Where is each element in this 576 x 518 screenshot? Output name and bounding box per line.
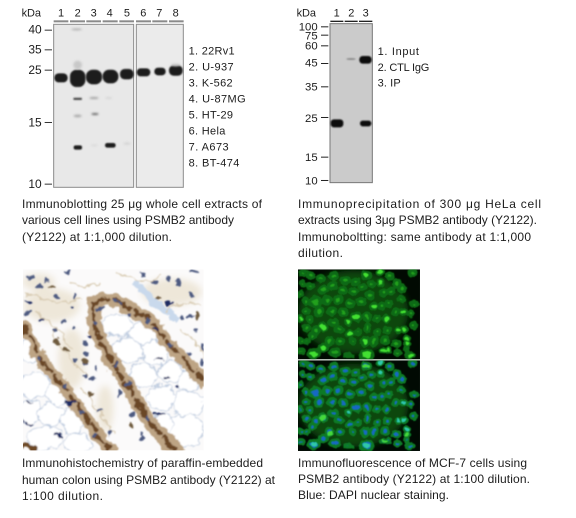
- stroma tint: [22, 274, 202, 432]
- crypt epithelium, lower left: [23, 327, 110, 450]
- dark nuclei: [24, 300, 180, 437]
- molecular weight markers: 15: [305, 152, 318, 164]
- caption: western blot: various cell lines using PSMB2 antibody: [22, 213, 234, 227]
- molecular weight markers: 25: [305, 113, 318, 125]
- molecular weight markers: 75: [305, 31, 318, 43]
- faint IgG band: [346, 58, 356, 60]
- crypt goblet cells: [19, 313, 205, 454]
- protein bands: [331, 56, 372, 127]
- molecular weight markers: 35: [305, 81, 318, 93]
- molecular weight markers: 35: [28, 42, 42, 56]
- protein bands: [54, 65, 183, 150]
- IP legend: 2. CTL IgG: [378, 62, 429, 74]
- stroma fibres: [25, 272, 204, 435]
- molecular weight markers: [299, 22, 318, 187]
- blot panel right: [136, 24, 183, 187]
- blue stroma streak: [135, 282, 178, 320]
- green channel panel: [298, 269, 420, 359]
- axis label kDa: kDa: [297, 8, 317, 20]
- caption: western blot: (Y2122) at 1:1,000 dilution.: [22, 230, 172, 244]
- molecular weight markers: [28, 23, 42, 191]
- blot axis label kDa: kDa: [22, 8, 42, 20]
- cell line legend: 4. U-87MG: [189, 94, 246, 106]
- molecular weight markers: 60: [305, 40, 318, 52]
- tissue texture group: [19, 270, 205, 454]
- lane numbers: 3: [363, 8, 369, 20]
- caption: western blot: [22, 197, 263, 244]
- marker ticks: [45, 30, 52, 185]
- caption: immunoprecipitation: [298, 197, 541, 260]
- immunohistochemistry image: [19, 269, 205, 454]
- bright green cells: [299, 270, 414, 358]
- caption: immunoprecipitation: Immunoboltting: same antibody at 1:1,000: [298, 230, 531, 244]
- IP legend: 3. IP: [378, 78, 401, 90]
- faint minor bands: [71, 28, 180, 146]
- blot panel: [330, 24, 372, 183]
- cell line legend: 7. A673: [189, 142, 229, 154]
- lane numbers: 8: [173, 8, 179, 20]
- caption: immunoprecipitation: Immunoprecipitation of 300 μg HeLa cell: [298, 197, 541, 211]
- molecular weight markers: 10: [28, 177, 42, 191]
- lane numbers: [58, 8, 179, 20]
- lane numbers: 6: [140, 8, 146, 20]
- cell line legend: 2. U-937: [189, 62, 234, 74]
- caption: immunohistochemistry: human colon using PSMB2 antibody (Y2122) at: [22, 473, 276, 487]
- IP legend: [378, 46, 429, 90]
- molecular weight markers: 25: [28, 63, 42, 77]
- brown stroma nuclei: [47, 285, 199, 431]
- cell line legend: 6. Hela: [189, 126, 226, 138]
- lane bars: [330, 21, 372, 22]
- caption: immunoprecipitation: extracts using 3μg PSMB2 antibody (Y2122).: [298, 213, 537, 227]
- caption: immunofluorescence: Immunofluorescence of MCF-7 cells using: [298, 456, 527, 470]
- cell line legend: [189, 46, 246, 170]
- caption: immunofluorescence: PSMB2 antibody (Y2122) at 1:100 dilution.: [298, 472, 530, 486]
- molecular weight markers: 100: [299, 22, 318, 34]
- cell line legend: 3. K-562: [189, 78, 233, 90]
- cell line legend: 5. HT-29: [189, 110, 233, 122]
- molecular weight markers: 10: [305, 175, 318, 187]
- caption: immunohistochemistry: Immunohistochemistry of paraffin-embedded: [22, 456, 263, 470]
- cell line legend: 8. BT-474: [189, 158, 239, 170]
- caption: immunohistochemistry: [22, 456, 276, 503]
- caption: western blot: Immunoblotting 25 μg whole cell extracts of: [22, 197, 263, 211]
- lane numbers: 1: [334, 8, 340, 20]
- cell line legend: 1. 22Rv1: [189, 46, 235, 58]
- lane numbers: 4: [107, 8, 113, 20]
- lane numbers: [334, 8, 369, 20]
- marker ticks: [321, 26, 328, 181]
- cell nuclei: [25, 270, 204, 439]
- molecular weight markers: 40: [28, 23, 42, 37]
- lane numbers: 5: [124, 8, 130, 20]
- crypt epithelium, upper right: [94, 299, 204, 450]
- IP legend: 1. Input: [378, 46, 419, 58]
- lane numbers: 1: [58, 8, 64, 20]
- caption: immunofluorescence: [298, 456, 530, 502]
- molecular weight markers: 15: [28, 115, 42, 129]
- divider: [298, 358, 420, 361]
- lane bars: [54, 20, 184, 22]
- blot panel left: [54, 24, 134, 187]
- lane numbers: 3: [91, 8, 97, 20]
- immunoprecipitation figure: [297, 8, 429, 187]
- cyan and green highlights: [311, 360, 409, 448]
- lane numbers: 2: [75, 8, 81, 20]
- merged DAPI panel: [298, 360, 420, 451]
- immunofluorescence image: [298, 269, 420, 451]
- lane numbers: 7: [156, 8, 162, 20]
- molecular weight markers: 45: [305, 57, 318, 69]
- caption: immunofluorescence: Blue: DAPI nuclear staining.: [298, 488, 449, 502]
- western blot figure: [22, 8, 246, 191]
- lane numbers: 2: [348, 8, 354, 20]
- caption: immunoprecipitation: dilution.: [298, 246, 343, 260]
- caption: immunohistochemistry: 1:100 dilution.: [22, 489, 103, 503]
